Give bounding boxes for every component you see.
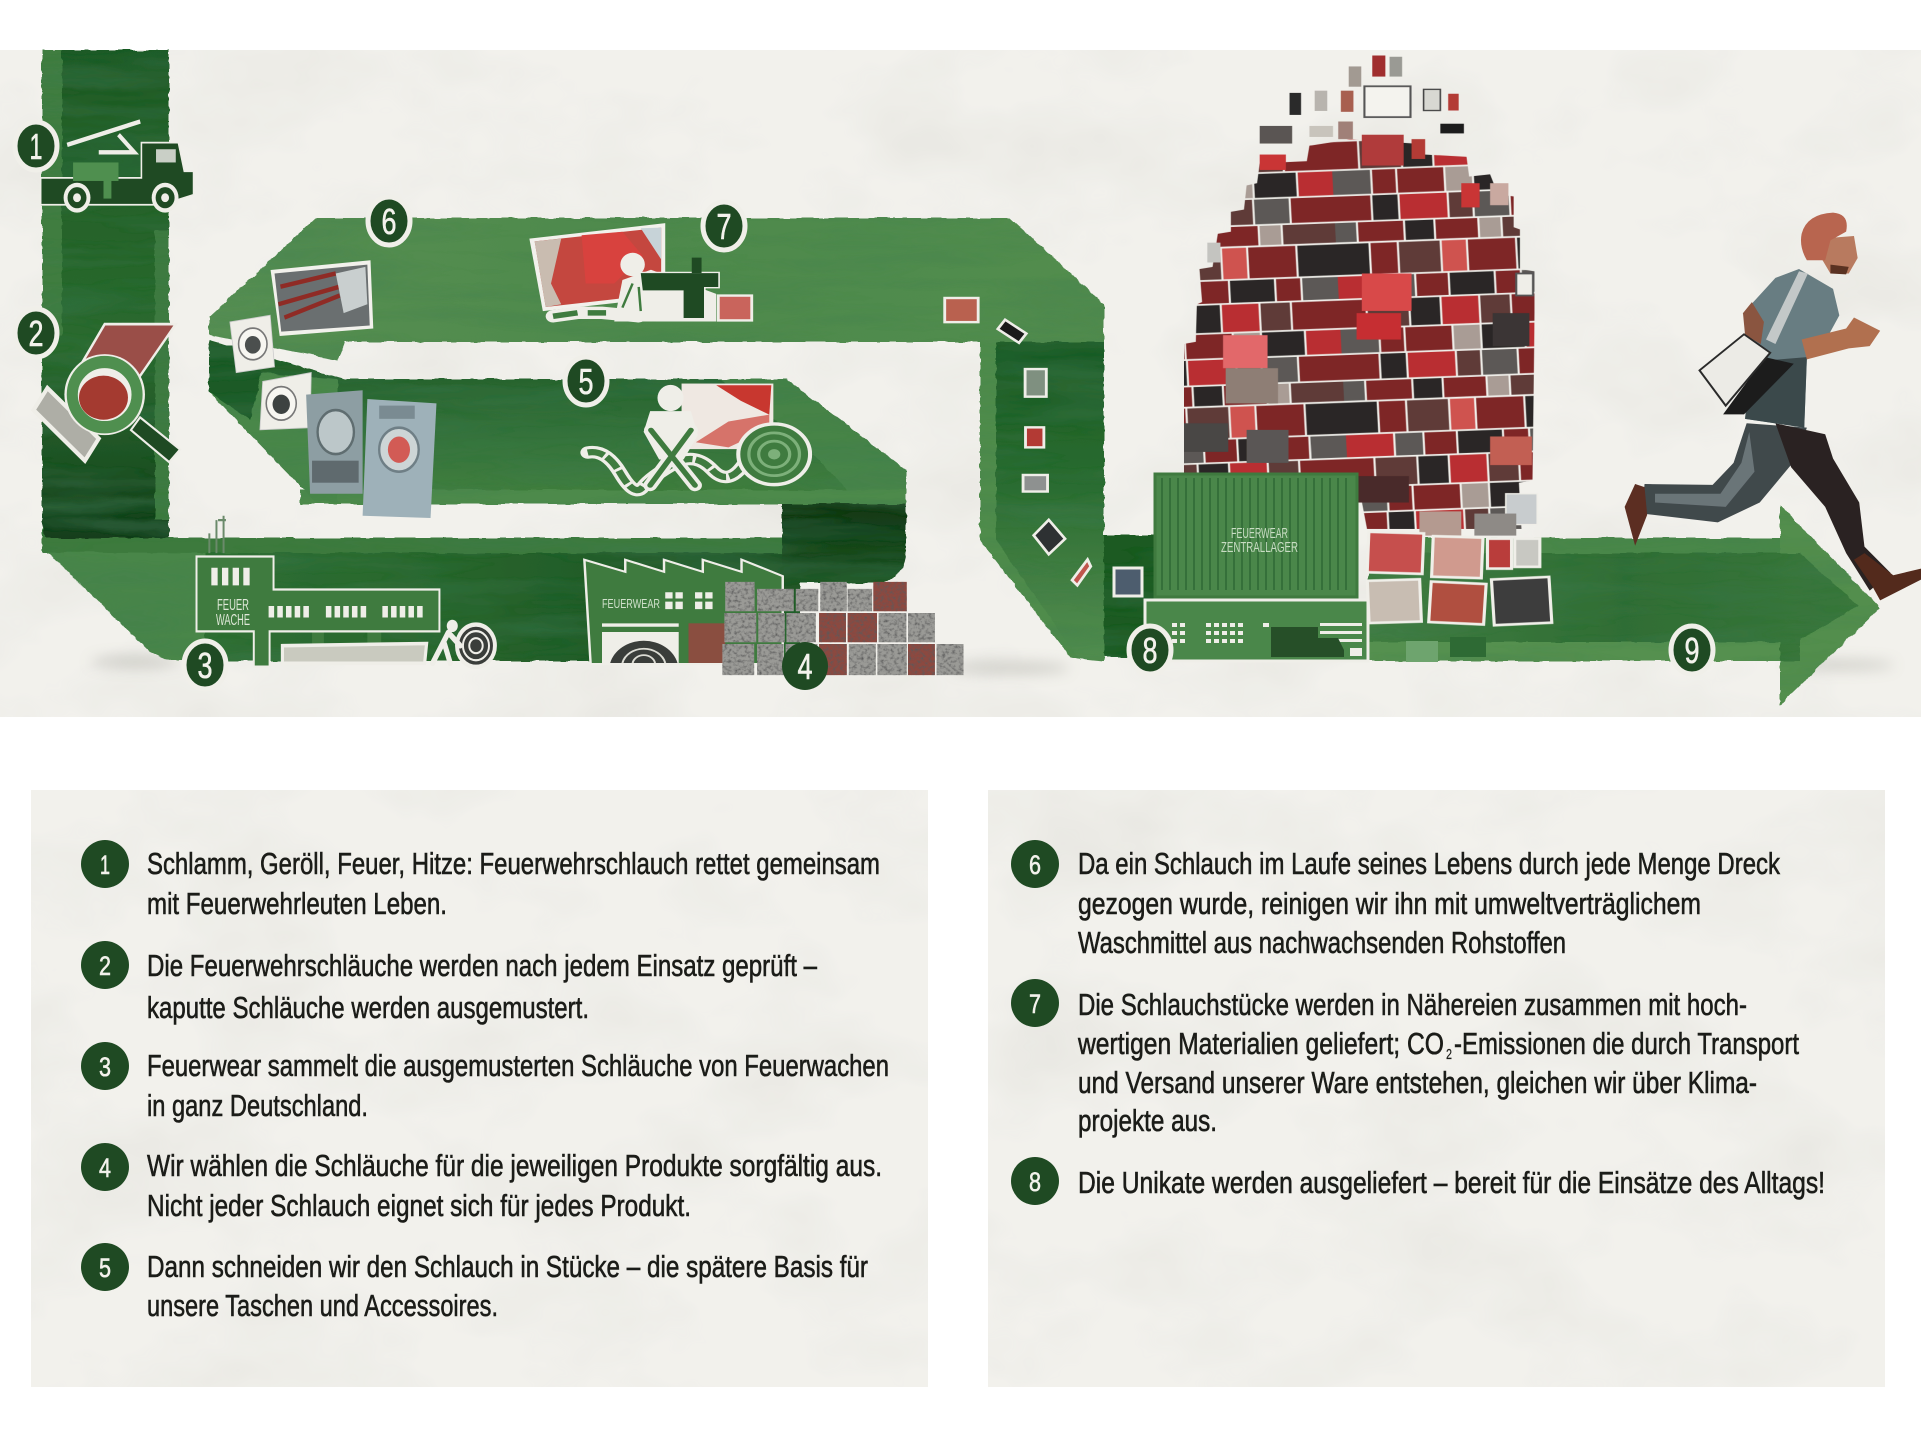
step 6 text: Waschmittel aus nachwachsenden Rohstoffen <box>1078 925 1566 960</box>
container label: ZENTRALLAGER <box>1221 539 1298 556</box>
step 5 text: Dann schneiden wir den Schlauch in Stücke – die spätere Basis für <box>147 1249 868 1284</box>
ground shadows <box>90 656 1895 674</box>
step 7 icon: sewing scene <box>529 223 1091 585</box>
badge 9: 9 <box>1684 630 1700 671</box>
badge 4 <box>782 642 828 690</box>
cut hose pieces <box>718 296 1091 585</box>
figure with scissors <box>644 385 698 485</box>
step 7 text <box>1011 979 1799 1138</box>
sewing photo <box>529 223 665 311</box>
step 2 text: Die Feuerwehrschläuche werden nach jedem Einsatz geprüft – <box>147 948 818 983</box>
hose section: bend to row 5 <box>782 500 906 661</box>
hose section: vertical drop <box>42 50 169 545</box>
step 1 icon: fire truck <box>41 121 193 213</box>
hose section: row 5 <box>209 340 906 504</box>
step 6 text: gezogen wurde, reinigen wir ihn mit umweltverträglichem <box>1078 886 1701 921</box>
hose section: bottom run <box>42 525 800 661</box>
panel: steps 6 to 8 <box>988 790 1885 1387</box>
step 7 text: -Emissionen die durch Transport <box>1454 1026 1799 1061</box>
badge 8: 8 <box>1142 630 1158 671</box>
badge 9 <box>1671 626 1713 674</box>
step 6 icons: wash photo and washing machines <box>230 260 436 518</box>
panel: steps 1 to 5 <box>31 790 928 1387</box>
station label: WACHE <box>216 612 250 629</box>
step 8 text: 8 <box>1029 1167 1041 1197</box>
step 4 icon: factory <box>586 561 782 663</box>
step 2 text <box>81 941 818 1025</box>
step 2 text: 2 <box>99 951 111 981</box>
hose section: left fold light <box>209 345 338 502</box>
messenger bag <box>1700 334 1794 414</box>
step 6 text <box>1011 840 1780 960</box>
step 1 text: Schlamm, Geröll, Feuer, Hitze: Feuerwehrschlauch rettet gemeinsam <box>147 846 880 881</box>
large finished bags <box>1367 532 1552 625</box>
step 5 text: 5 <box>99 1253 111 1283</box>
step 4 icon: stacked hose bales <box>722 582 963 675</box>
container label: FEUERWEAR <box>1231 525 1288 542</box>
step 5 icon: cutting scene <box>588 384 810 490</box>
badge 3 <box>184 641 226 689</box>
hose section: row 5 light chamfer <box>720 379 906 504</box>
step 4 text: 4 <box>99 1153 111 1183</box>
wash photo <box>271 260 373 336</box>
step 7 text: 7 <box>1029 989 1041 1019</box>
process hose: green path <box>42 50 1880 705</box>
badge 2 <box>15 309 57 357</box>
station label <box>216 597 250 629</box>
warehouse container <box>1155 474 1357 597</box>
step 4 text: Wir wählen die Schläuche für die jeweiligen Produkte sorgfältig aus. <box>147 1148 882 1183</box>
badge 3: 3 <box>198 645 212 686</box>
step 8: warehouse base <box>1145 600 1368 661</box>
factory label: FEUERWEAR <box>602 596 660 611</box>
badge 6: 6 <box>382 201 396 242</box>
step 4 text: Nicht jeder Schlauch eignet sich für jedes Produkt. <box>147 1188 691 1223</box>
arm <box>1802 318 1880 359</box>
front boot <box>1854 553 1921 600</box>
badge 7 <box>703 202 745 250</box>
back leg <box>1642 423 1807 522</box>
step 2 icon: magnifier over hose <box>34 324 179 461</box>
step 5 text: unsere Taschen und Accessoires. <box>147 1288 498 1323</box>
step 3 text <box>81 1042 889 1123</box>
blue machine <box>363 399 436 518</box>
step 7 text: projekte aus. <box>1078 1103 1217 1138</box>
hose section: second vertical <box>980 342 1104 661</box>
badge 5: 5 <box>578 361 594 402</box>
hose section: connector to warehouse <box>1104 535 1164 657</box>
white figure <box>614 253 716 321</box>
cutting photo <box>682 384 773 449</box>
front leg <box>1775 423 1891 591</box>
badge 6 <box>368 197 410 245</box>
badge 2: 2 <box>28 313 44 354</box>
step 3 text: Feuerwear sammelt die ausgemusterten Schläuche von Feuerwachen <box>147 1048 889 1083</box>
step 7 text: 2 <box>1446 1046 1452 1063</box>
step 3 figure with hose coil <box>433 620 495 667</box>
small bag by the warehouse <box>1114 568 1142 596</box>
badge 1: 1 <box>30 126 42 167</box>
head <box>1801 213 1858 274</box>
runner with bag <box>1625 213 1921 600</box>
container label <box>1221 525 1298 556</box>
badge 7: 7 <box>716 206 732 247</box>
step 2 text: kaputte Schläuche werden ausgemustert. <box>147 990 589 1025</box>
torso <box>1745 269 1839 428</box>
back boot <box>1625 484 1647 546</box>
pile body <box>1184 139 1535 529</box>
step 1 text: 1 <box>100 850 110 880</box>
step 8 text <box>1011 1157 1825 1205</box>
badge 4: 4 <box>798 646 812 687</box>
hose coil <box>738 424 810 485</box>
hose section: lower strip of row 5 <box>300 490 906 504</box>
step 7 text: Die Schlauchstücke werden in Nähereien zusammen mit hoch- <box>1078 987 1747 1022</box>
step 7 text: und Versand unserer Ware entstehen, gleichen wir über Klima- <box>1078 1065 1757 1100</box>
step badges on illustration <box>15 122 1713 690</box>
step 1 text: mit Feuerwehrleuten Leben. <box>147 886 447 921</box>
sewing machine <box>641 258 718 318</box>
step 3 text: in ganz Deutschland. <box>147 1088 368 1123</box>
step 3 text: 3 <box>99 1052 111 1082</box>
station label: FEUER <box>217 597 249 614</box>
badge 5 <box>565 357 607 405</box>
top scattered items <box>1290 55 1464 159</box>
hose strip wave <box>588 452 745 490</box>
step 5 text <box>81 1243 868 1323</box>
step 1 text <box>81 840 880 921</box>
arrow details: small box and truck <box>1406 637 1486 662</box>
grey machine <box>306 390 363 494</box>
strap <box>1766 271 1808 344</box>
step 7 text: wertigen Materialien geliefert; CO <box>1077 1026 1444 1061</box>
hose section: top run <box>209 218 1104 360</box>
step 6 text: 6 <box>1029 850 1041 880</box>
highlighted bags in pile <box>1184 126 1537 536</box>
hose strip <box>553 313 639 316</box>
illustration panel: paper background <box>0 50 1921 717</box>
badge 8 <box>1129 626 1171 674</box>
badge 1 <box>15 122 57 170</box>
washing machine outlines <box>230 315 311 430</box>
pile of finished bags <box>1179 55 1552 625</box>
hose section: arrow <box>1368 505 1880 705</box>
step 3 icon: fire station <box>198 516 438 666</box>
step 4 text <box>81 1143 882 1223</box>
